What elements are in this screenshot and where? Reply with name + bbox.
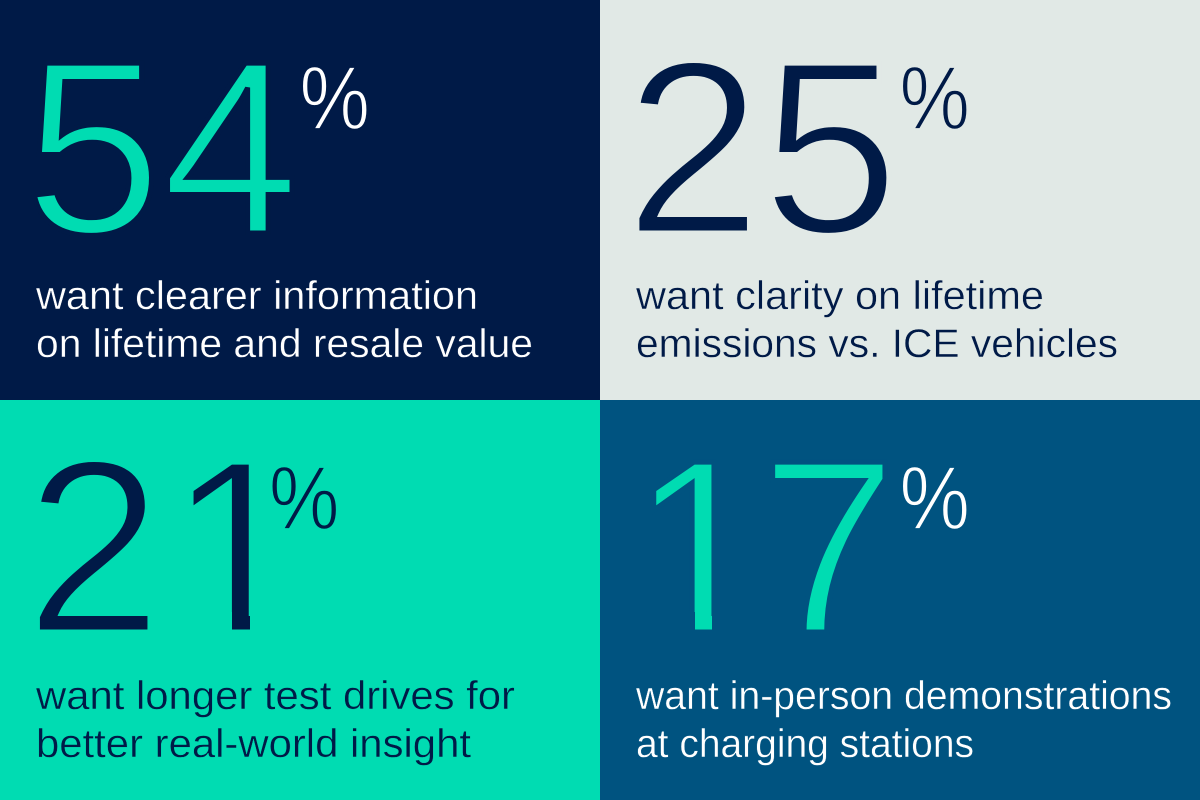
caption: want clarity on lifetime <box>635 274 1044 318</box>
panel: 54 percent <box>0 0 600 400</box>
big number: 17: 1 <box>630 409 767 685</box>
panel background: navy <box>0 0 600 400</box>
percent sign: % <box>900 447 970 548</box>
caption: at charging stations <box>636 722 974 766</box>
panel background: blue <box>600 400 1200 800</box>
big number: 17 <box>656 464 882 630</box>
caption <box>35 674 515 766</box>
big number: 21: 2 <box>25 409 162 685</box>
caption: better real-world insight <box>36 722 471 766</box>
caption <box>35 274 533 366</box>
caption: on lifetime and resale value <box>36 322 533 366</box>
caption <box>635 274 1118 366</box>
big number: 17: 7 <box>760 409 897 685</box>
caption: emissions vs. ICE vehicles <box>636 322 1118 366</box>
caption <box>635 674 1172 766</box>
caption: want in-person demonstrations <box>635 674 1172 718</box>
big number: 25: 25 <box>624 10 899 286</box>
panel: 25 percent <box>600 0 1200 400</box>
big number: 54: 54 <box>24 10 299 286</box>
panel: 21 percent <box>0 400 600 800</box>
big number: 21: 1 <box>167 409 305 685</box>
panel background: teal <box>0 400 600 800</box>
percent sign: % <box>269 447 339 548</box>
panel background: pale grey <box>600 0 1200 400</box>
panel: 17 percent <box>600 400 1200 800</box>
percent sign: % <box>300 47 370 148</box>
big number: 21 <box>40 462 250 630</box>
caption: want longer test drives for <box>35 674 515 718</box>
percent sign: % <box>900 47 970 148</box>
caption: want clearer information <box>35 274 478 318</box>
